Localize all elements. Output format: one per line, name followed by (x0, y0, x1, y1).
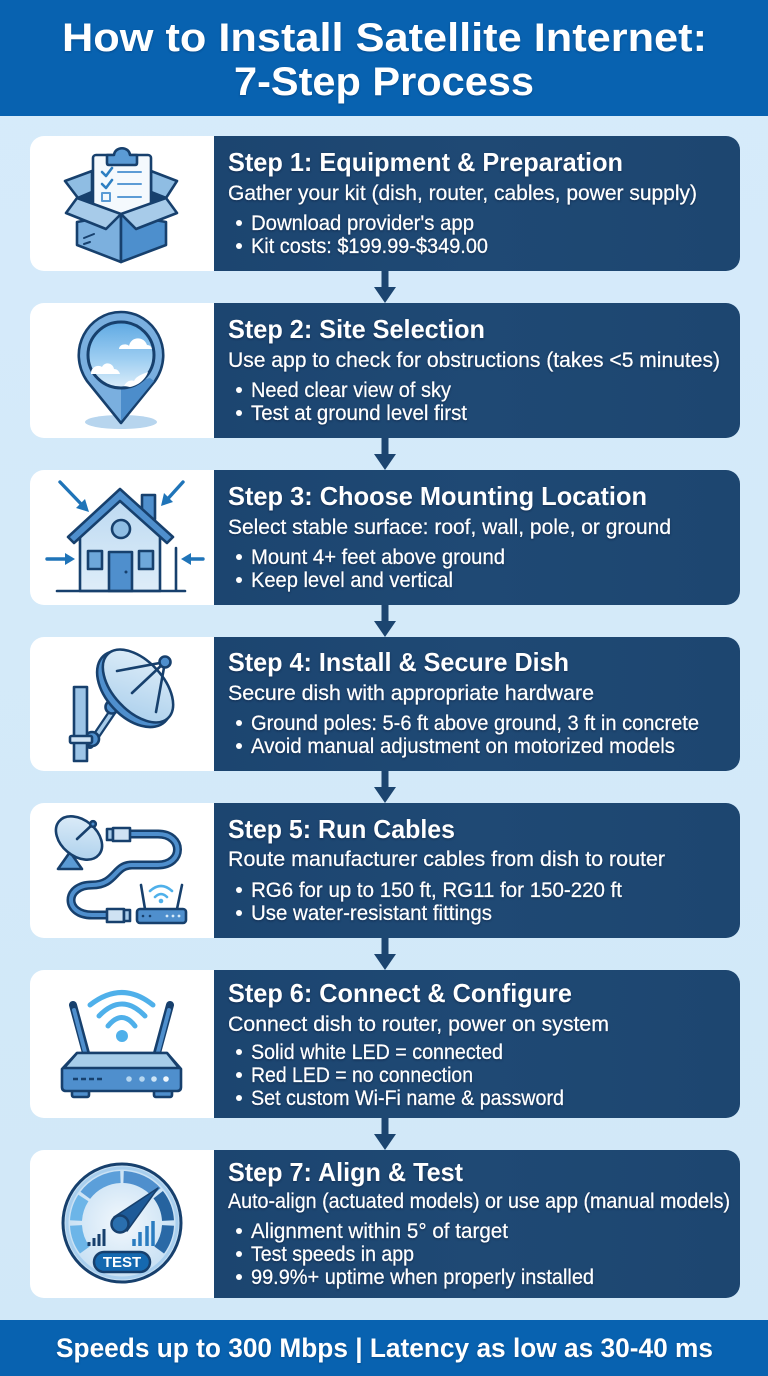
footer stats text: Speeds up to 300 Mbps | Latency as low as 30-40 ms (56, 1333, 713, 1363)
bullet list: step 1 (236, 211, 488, 258)
bullet list: step 4: Avoid manual adjustment on motorized models (251, 734, 675, 758)
description: step 1: Gather your kit (dish, router, cables, power supply) (228, 182, 697, 205)
bullet list: step 6: Red LED = no connection (251, 1063, 473, 1087)
heading: step 5: Step 5: Run Cables (228, 814, 455, 844)
title (62, 16, 707, 104)
heading: step 6: Step 6: Connect & Configure (228, 978, 572, 1008)
bullet list: step 1: Kit costs: $199.99-$349.00 (251, 234, 488, 258)
icon: dish, cable and router (48, 807, 186, 923)
arrow: step 2 to 3 (374, 438, 396, 470)
arrow: step 4 to 5 (374, 771, 396, 803)
icon: speed test gauge (63, 1164, 181, 1282)
icon: speed test gauge: TEST (103, 1254, 141, 1271)
panel: step 5 (30, 803, 740, 938)
title: 7-Step Process (234, 60, 534, 104)
panel: step 4 (30, 637, 740, 771)
heading: step 1: Step 1: Equipment & Preparation (228, 147, 623, 177)
panel: step 2 (30, 303, 740, 438)
arrow: step 3 to 4 (374, 605, 396, 637)
title: How to Install Satellite Internet: (62, 16, 707, 60)
description: step 4: Secure dish with appropriate hardware (228, 682, 594, 705)
bullet list: step 3: Mount 4+ feet above ground (251, 545, 505, 569)
panel: step 7 (30, 1150, 740, 1298)
description: step 2: Use app to check for obstructions (takes <5 minutes) (228, 349, 720, 372)
bullet list: step 5: Use water-resistant fittings (251, 901, 492, 925)
bullet list: step 3 (236, 545, 505, 592)
bullet list: step 1: Download provider's app (251, 211, 474, 235)
description: step 5: Route manufacturer cables from dish to router (228, 848, 665, 871)
header banner (0, 0, 768, 116)
arrow: step 6 to 7 (374, 1118, 396, 1150)
bullet list: step 5: RG6 for up to 150 ft, RG11 for 150-220 ft (251, 878, 622, 902)
heading: step 7: Step 7: Align & Test (228, 1157, 463, 1187)
bullet list: step 4 (236, 711, 699, 758)
bullet list: step 7: Alignment within 5° of target (251, 1219, 508, 1243)
description: step 7: Auto-align (actuated models) or use app (manual models) (228, 1190, 730, 1213)
arrow: step 1 to 2 (374, 271, 396, 303)
panel: step 1 (30, 136, 740, 271)
icon: satellite dish on pole (70, 637, 186, 761)
bullet list: step 7: Test speeds in app (251, 1242, 414, 1266)
bullet list: step 4: Ground poles: 5-6 ft above ground, 3 ft in concrete (251, 711, 699, 735)
bullet list: step 2 (236, 378, 467, 425)
icon: open box with checklist (65, 148, 177, 262)
bullet list: step 3: Keep level and vertical (251, 568, 453, 592)
footer banner (0, 1320, 768, 1376)
arrow: step 5 to 6 (374, 938, 396, 970)
panel: step 3 (30, 470, 740, 605)
bullet list: step 6 (236, 1040, 564, 1110)
heading: step 4: Step 4: Install & Secure Dish (228, 647, 569, 677)
bullet list: step 5 (236, 878, 622, 925)
bullet list: step 2: Need clear view of sky (251, 378, 451, 402)
bullet list: step 2: Test at ground level first (251, 401, 467, 425)
icon: location pin with sky (79, 312, 163, 429)
panel: step 6 (30, 970, 740, 1118)
bullet list: step 6: Set custom Wi-Fi name & password (251, 1086, 564, 1110)
heading: step 3: Step 3: Choose Mounting Location (228, 481, 647, 511)
bullet list: step 7: 99.9%+ uptime when properly installed (251, 1265, 594, 1289)
bullet list: step 7 (236, 1219, 594, 1289)
bullet list: step 6: Solid white LED = connected (251, 1040, 503, 1064)
description: step 3: Select stable surface: roof, wall, pole, or ground (228, 516, 671, 539)
description: step 6: Connect dish to router, power on system (228, 1013, 609, 1036)
icon: house with mounting arrows (47, 482, 203, 591)
icon: wi-fi router (62, 992, 181, 1097)
heading: step 2: Step 2: Site Selection (228, 314, 485, 344)
